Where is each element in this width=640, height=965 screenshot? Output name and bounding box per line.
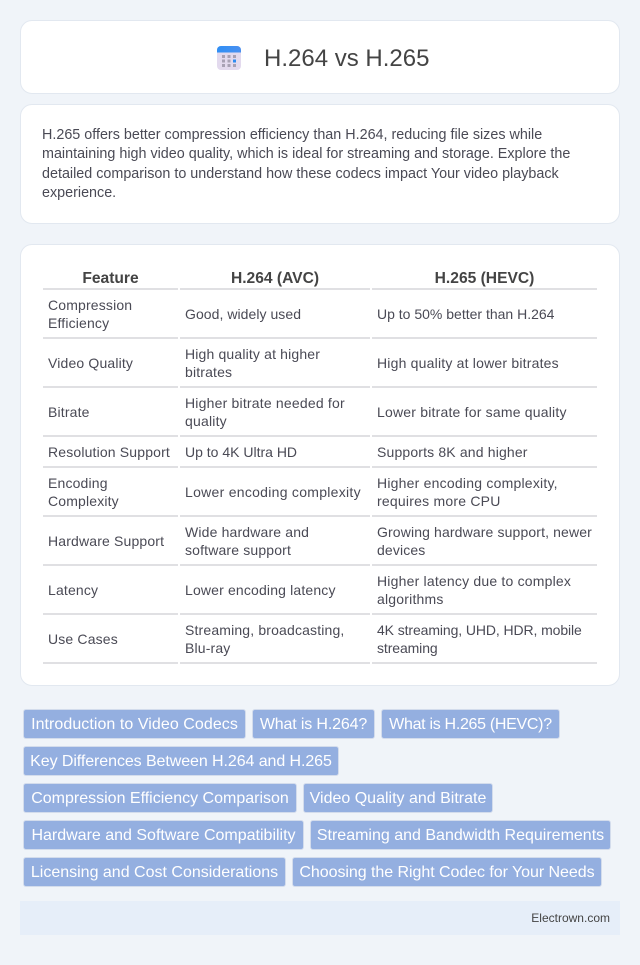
table content: Good, widely used [185, 306, 301, 322]
table content: Blu-ray [185, 640, 230, 656]
table content: algorithms [377, 591, 444, 607]
table content: quality [185, 413, 227, 429]
table content: Higher encoding complexity, [377, 475, 558, 491]
table content: devices [377, 542, 425, 558]
table content: Higher bitrate needed for [185, 395, 345, 411]
footer credit: Electrown.com [531, 911, 610, 925]
table content: Use Cases [48, 631, 118, 647]
title: H.264 vs H.265 [264, 45, 429, 72]
table content: Streaming, broadcasting, [185, 622, 344, 638]
table header [82, 270, 534, 287]
panel: header card [20, 20, 620, 94]
table header: H.265 (HEVC) [435, 270, 534, 287]
table content: streaming [377, 640, 438, 656]
table content [43, 270, 597, 664]
table header: Feature [82, 270, 139, 287]
intro text: experience. [42, 185, 116, 201]
table content: bitrates [185, 364, 232, 380]
table content: Compression [48, 297, 132, 313]
topic tags: Key Differences Between H.264 and H.265 [30, 753, 332, 770]
table content: Up to 4K Ultra HD [185, 444, 297, 460]
topic tags: Hardware and Software Compatibility [31, 827, 296, 844]
intro text: detailed comparison to understand how these codecs impact Your video playback [42, 166, 559, 182]
icon: calendar [217, 46, 241, 70]
table content: Hardware Support [48, 533, 164, 549]
table content: Video Quality [48, 355, 133, 371]
table content: Lower bitrate for same quality [377, 404, 567, 420]
table content: Lower encoding latency [185, 582, 336, 598]
footer [20, 901, 620, 935]
table content: Higher latency due to complex [377, 573, 571, 589]
topic tags [23, 709, 611, 887]
topic tags: Choosing the Right Codec for Your Needs [299, 864, 595, 881]
intro text [42, 127, 570, 201]
table header: H.264 (AVC) [231, 270, 319, 287]
table content: High quality at higher [185, 346, 320, 362]
table content: Supports 8K and higher [377, 444, 528, 460]
intro text: H.265 offers better compression efficiency than H.264, reducing file sizes while [42, 127, 542, 143]
topic tags: Compression Efficiency Comparison [31, 790, 289, 807]
topic tags: Streaming and Bandwidth Requirements [317, 827, 604, 844]
table content: software support [185, 542, 291, 558]
topic tags: What is H.264? [260, 716, 367, 733]
panel: comparison table [20, 244, 620, 686]
table content: Lower encoding complexity [185, 484, 361, 500]
topic tags: Licensing and Cost Considerations [31, 864, 278, 881]
table content: Latency [48, 582, 98, 598]
table content: Up to 50% better than H.264 [377, 306, 554, 322]
table content: Efficiency [48, 315, 109, 331]
intro text: maintaining high video quality, which is ideal for streaming and storage. Explore the [42, 146, 570, 162]
topic tags: What is H.265 (HEVC)? [389, 716, 552, 733]
table content: Bitrate [48, 404, 90, 420]
table content: requires more CPU [377, 493, 501, 509]
table content: Growing hardware support, newer [377, 524, 592, 540]
topic tags: Video Quality and Bitrate [310, 790, 486, 807]
table content: 4K streaming, UHD, HDR, mobile [377, 622, 582, 638]
table content: Complexity [48, 493, 119, 509]
table content: Encoding [48, 475, 108, 491]
table content: High quality at lower bitrates [377, 355, 559, 371]
table content: Resolution Support [48, 444, 170, 460]
topic tags: Introduction to Video Codecs [31, 716, 238, 733]
table content: Wide hardware and [185, 524, 309, 540]
panel: intro card [20, 104, 620, 224]
